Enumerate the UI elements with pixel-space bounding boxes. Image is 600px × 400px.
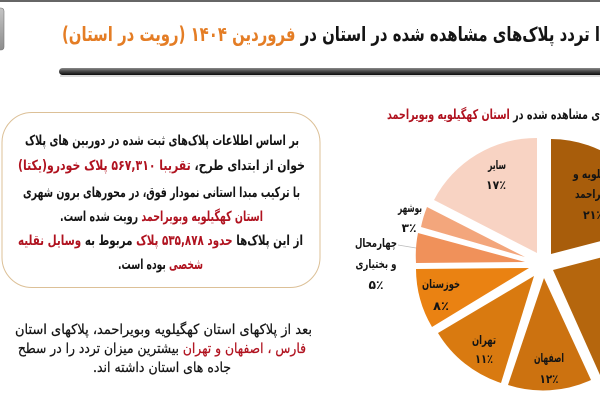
label: Chaharmahal and Bakhtiari: و بختیاری: [356, 257, 396, 272]
slice: Tehran: [438, 276, 534, 383]
slice: Khuzestan: [416, 268, 529, 327]
title divider bar: [59, 68, 600, 77]
callout: plate statistics: با ترکیب مبدا استانی نمودار فوق، در محورهای برون شهری: [23, 185, 300, 201]
slice: Chaharmahal: [416, 233, 525, 263]
label: Chaharmahal and Bakhtiari: ۵٪: [368, 278, 384, 292]
callout: plate statistics: خوان از ابتدای طرح، تقریبا ۵۶۷,۳۱۰ پلاک خودرو(یکتا): [18, 158, 305, 174]
label: Bushehr: [397, 201, 422, 235]
slice: Khuzestan: ۸٪: [433, 299, 449, 313]
slice: other: ۱۷٪: [486, 178, 506, 192]
slice: Fars: [553, 241, 600, 375]
slice: Kohgiluyeh: [551, 139, 600, 254]
label: Chaharmahal and Bakhtiari: [355, 236, 416, 292]
text block: top provinces: [15, 321, 312, 376]
slice: Isfahan: ۱۲٪: [540, 372, 558, 386]
slice: Khuzestan: خوزستان: [422, 277, 460, 292]
text block: top provinces: فارس ، اصفهان و تهران بیشترین میزان تردد را در سطح: [18, 341, 306, 357]
slice: other: سایر: [487, 158, 506, 172]
slice: Tehran: تهران: [472, 333, 496, 347]
slice: other: [434, 138, 537, 253]
callout: plate statistics: از این پلاک‌ها حدود ۵۳۵,۸۷۸ پلاک مربوط به وسایل نقلیه: [18, 233, 303, 249]
text block: top provinces: بعد از پلاکهای استان کهگیلویه وبویراحمد، پلاکهای استان: [15, 321, 312, 338]
text block: top provinces: جاده های استان داشته اند.: [93, 360, 231, 376]
callout: plate statistics: بر اساس اطلاعات پلاک‌های ثبت شده در دوربین های پلاک: [25, 133, 299, 149]
label: Bushehr: بوشهر: [397, 201, 422, 216]
side tab: [0, 8, 4, 50]
label: Chaharmahal and Bakhtiari: چهارمحال: [355, 236, 397, 250]
slice: Tehran: ۱۱٪: [475, 352, 493, 366]
label: Bushehr: ۳٪: [402, 221, 416, 235]
callout: plate statistics: [2, 112, 320, 288]
slice: Isfahan: [508, 278, 591, 390]
slice: Bushehr: [421, 207, 525, 257]
callout: plate statistics: شخصی بوده است.: [118, 257, 203, 273]
pie chart: [355, 138, 600, 390]
slice: Isfahan: اصفهان: [534, 351, 564, 365]
callout: plate statistics: استان کهگیلویه وبویراحمد رویت شده است.: [60, 208, 263, 225]
